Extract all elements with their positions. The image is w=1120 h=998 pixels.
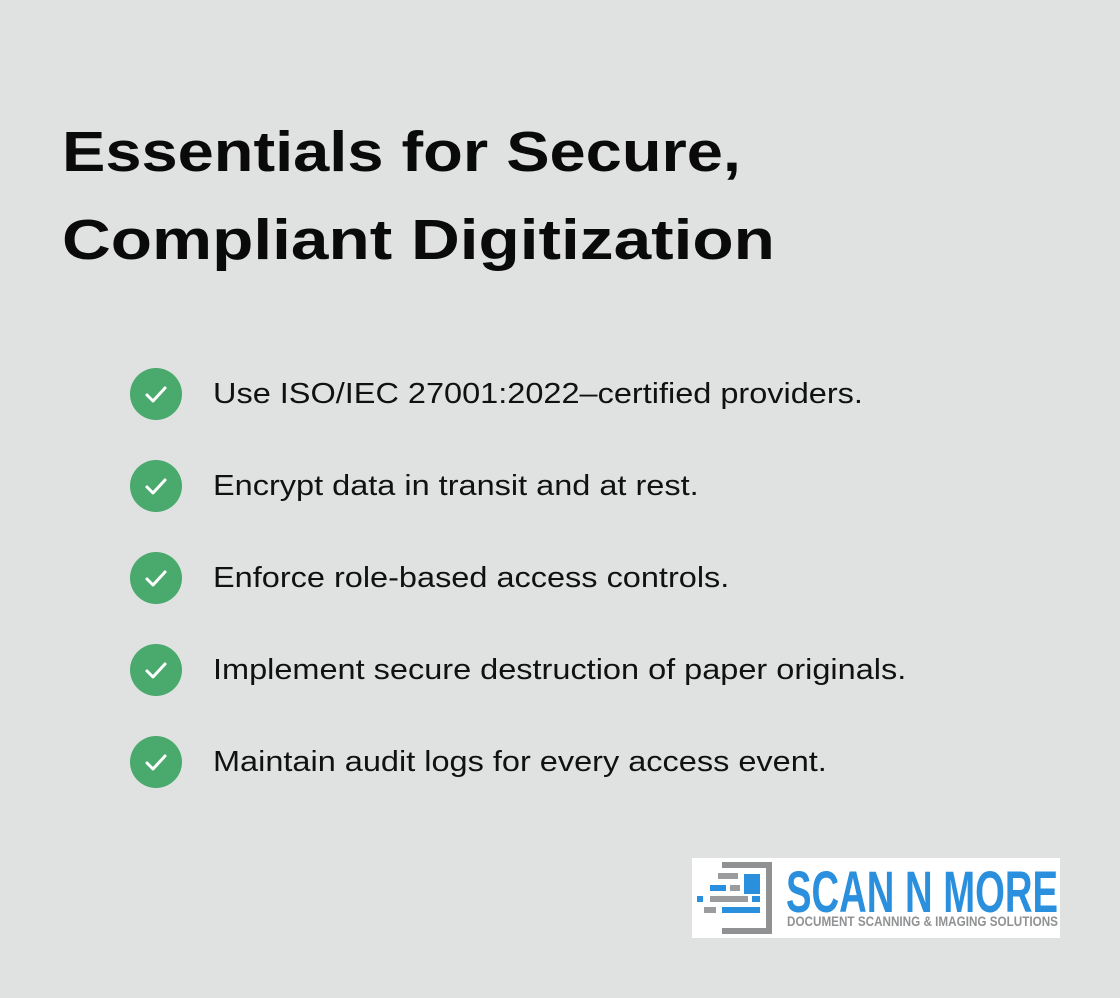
list item 2 [130, 460, 699, 512]
list item 3 [130, 552, 729, 604]
list item 3: Enforce role-based access controls. [213, 562, 729, 594]
list item 2: Encrypt data in transit and at rest. [213, 470, 699, 502]
list item 5: Maintain audit logs for every access event. [213, 746, 827, 778]
list item 5 [130, 736, 827, 788]
list item 4 [130, 644, 906, 696]
title [62, 120, 775, 272]
logo [692, 858, 1060, 938]
title: Essentials for Secure, [62, 120, 741, 184]
title: Compliant Digitization [62, 208, 775, 272]
list item 1: Use ISO/IEC 27001:2022–certified providers. [213, 378, 863, 410]
list item 1 [130, 368, 863, 420]
list item 4: Implement secure destruction of paper originals. [213, 654, 906, 686]
